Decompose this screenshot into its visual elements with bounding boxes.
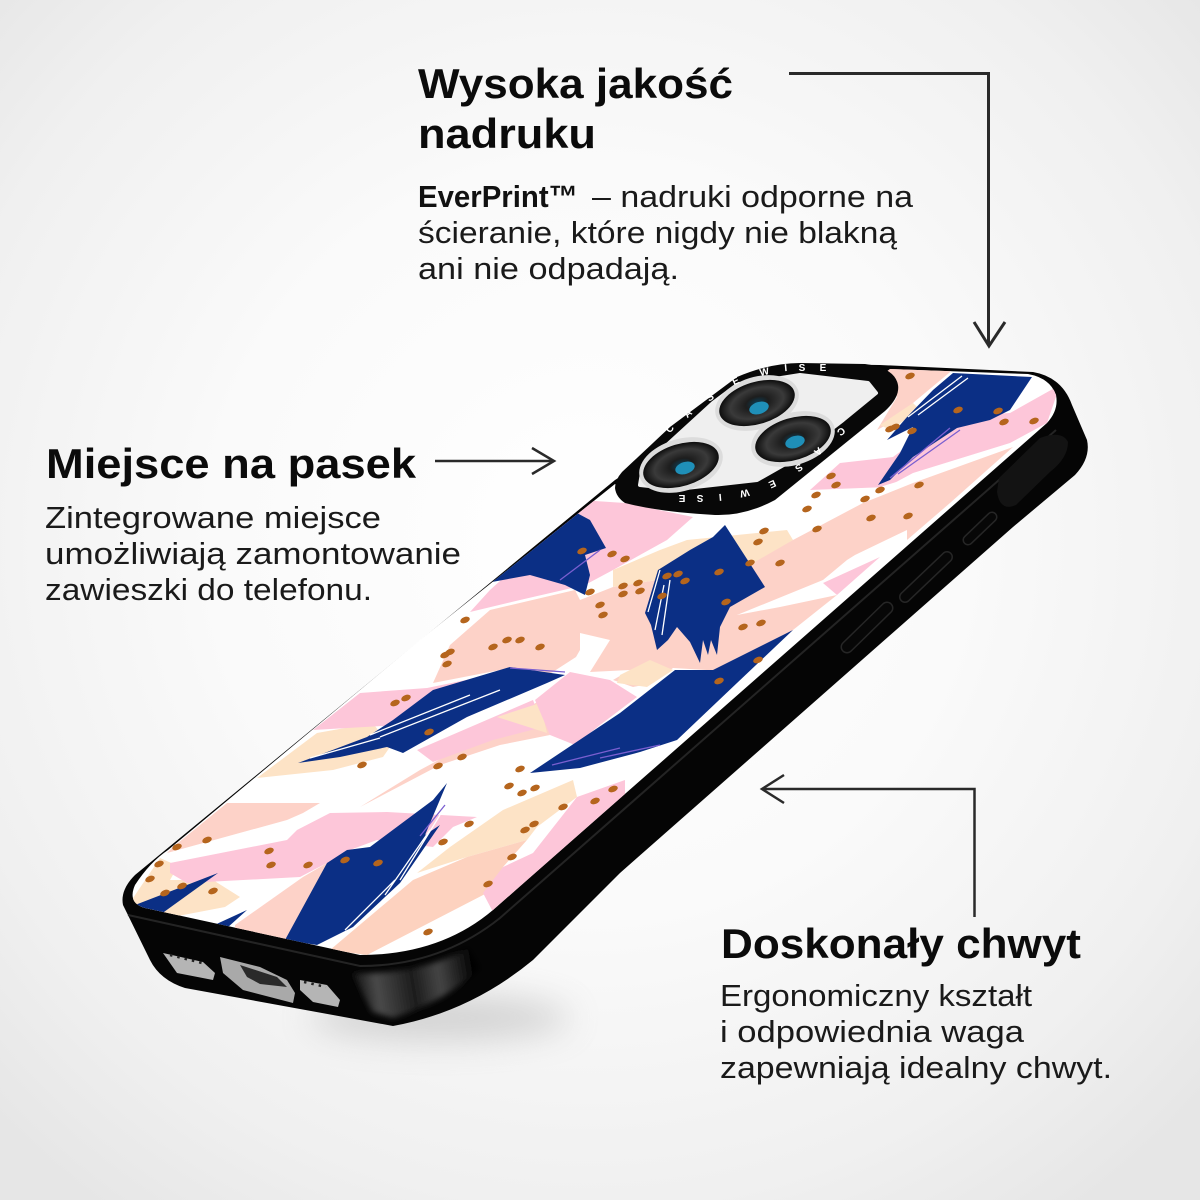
navy brush strokes <box>135 373 1032 945</box>
phone case <box>120 360 1088 1026</box>
callout: grip <box>720 775 1112 1085</box>
heading: Wysoka jakość <box>418 60 733 107</box>
lens top <box>708 366 806 440</box>
body text: EverPrint™ <box>418 179 578 214</box>
heading: nadruku <box>418 110 596 157</box>
brand text on bump <box>664 363 847 503</box>
brand text on bump: E <box>678 492 685 503</box>
arrow right to phone <box>435 448 554 474</box>
camera window <box>640 375 876 489</box>
brand text on bump: I <box>784 363 788 374</box>
brand text on bump: S <box>799 363 806 374</box>
arrow left to phone <box>762 775 974 917</box>
heading <box>418 60 733 157</box>
lens left <box>632 428 730 502</box>
body text: zapewniają idealny chwyt. <box>720 1050 1112 1085</box>
brand text on bump: C <box>834 424 847 437</box>
body text: Zintegrowane miejsce <box>45 500 381 535</box>
body text: zawieszki do telefonu. <box>45 572 372 607</box>
side button upper <box>968 517 992 540</box>
lens right <box>744 402 842 476</box>
body text <box>45 500 461 607</box>
bottom corner gloss <box>352 948 480 1018</box>
brand text on bump: A <box>811 444 824 457</box>
body text <box>720 978 1112 1085</box>
side button middle <box>905 557 947 597</box>
heading: Doskonały chwyt <box>721 920 1081 967</box>
body text: ścieranie, które nigdy nie blakną <box>418 215 898 250</box>
brand text on bump: C <box>664 423 677 436</box>
brand text on bump: E <box>766 477 777 490</box>
brand text on bump: W <box>738 486 750 499</box>
brand text on bump: W <box>759 366 771 379</box>
case body <box>122 364 1088 1026</box>
USB port <box>220 957 295 1003</box>
side button lower <box>847 608 887 647</box>
brand text on bump: S <box>792 461 804 474</box>
callout: strap slot <box>45 440 554 607</box>
port speaker left <box>163 953 215 980</box>
body text: – nadruki odporne na <box>592 179 914 214</box>
heading: Miejsce na pasek <box>46 440 417 487</box>
callout: print quality <box>418 60 1005 346</box>
rim line <box>128 430 1056 966</box>
body text: umożliwiają zamontowanie <box>45 536 461 571</box>
strap slot <box>997 435 1068 507</box>
arrow down to phone <box>789 74 1005 346</box>
brand text on bump: E <box>731 375 742 388</box>
brand text on bump: S <box>696 492 703 503</box>
gold dots <box>144 371 1040 937</box>
brand text on bump: A <box>682 408 695 421</box>
body text: Ergonomiczny kształt <box>720 978 1032 1013</box>
brush streaks <box>310 376 968 930</box>
body text: i odpowiednia waga <box>720 1014 1025 1049</box>
brand text on bump: E <box>820 363 827 374</box>
printed back art <box>120 360 1070 960</box>
brand text on bump: I <box>718 491 722 502</box>
body text <box>418 179 914 286</box>
bump frame <box>615 363 898 515</box>
paint strokes pale <box>125 365 1060 955</box>
phone shadow <box>310 996 570 1040</box>
camera bump <box>615 363 898 515</box>
brand text on bump: S <box>705 391 717 404</box>
body text: ani nie odpadają. <box>418 251 679 286</box>
port speaker right <box>300 980 340 1007</box>
